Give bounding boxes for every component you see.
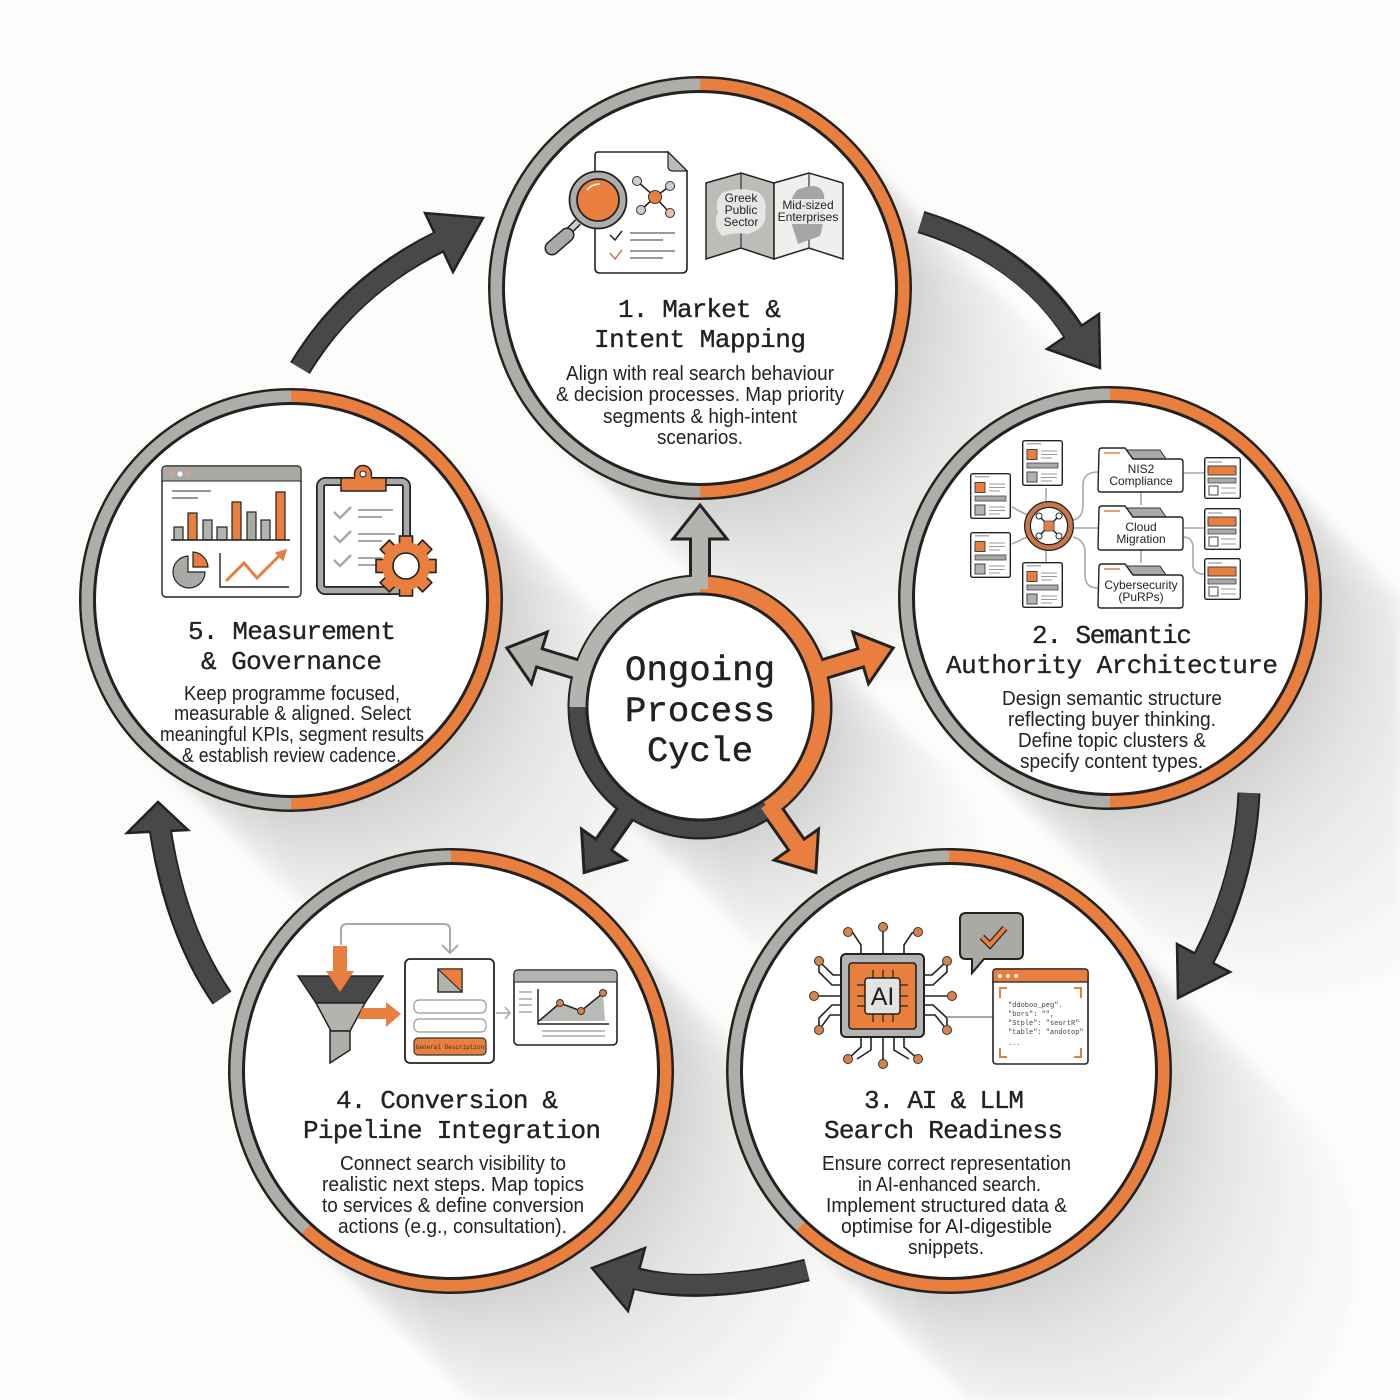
heading: step 4: Pipeline Integration	[303, 1116, 601, 1146]
icon: topic cluster diagram	[971, 441, 1240, 608]
text: step 3 description: snippets.	[908, 1237, 984, 1259]
icon: document with magnifier and network	[552, 152, 687, 273]
text: step 1 description: Align with real search behaviour	[566, 363, 834, 385]
icon: analytics window	[496, 970, 617, 1045]
icon: clipboard with gear	[320, 466, 436, 596]
panel: step 2 semantic authority architecture	[900, 388, 1320, 808]
text: code snippet: "table": "andotop"	[1008, 1029, 1084, 1037]
text: step 2 description: Design semantic structure	[1002, 688, 1222, 710]
panel: step 4 conversion and pipeline integration	[230, 850, 672, 1292]
text: map labels: Enterprises	[778, 210, 838, 224]
text: folder labels: (PuRPs)	[1118, 590, 1164, 604]
text: map labels: Mid-sized	[782, 198, 834, 212]
icon: dashboard	[162, 466, 301, 597]
icon: folded map with segments	[706, 173, 843, 259]
ring: hub band	[566, 569, 834, 838]
panel: central hub	[499, 505, 901, 888]
text: step 5 description: & establish review cadence.	[182, 745, 401, 767]
panel: step 5 measurement and governance	[80, 390, 502, 810]
text: form button: General Description	[416, 1044, 485, 1051]
text: code snippet: "ddoboo_peg".	[1008, 1002, 1063, 1010]
text: folder labels: Cloud	[1125, 520, 1157, 534]
arrow: step 1 to step 2	[921, 222, 1100, 368]
text: folder labels: Compliance	[1109, 474, 1173, 488]
text: step 3 description: optimise for AI-digestible	[841, 1216, 1052, 1238]
text: hub title: Ongoing	[625, 650, 775, 691]
panel: step 3 AI and LLM search readiness	[728, 850, 1170, 1292]
heading: step 4: 4. Conversion &	[336, 1086, 558, 1116]
text: code snippet: ...	[1008, 1040, 1021, 1048]
text: step 3 description: Implement structured data &	[826, 1195, 1068, 1217]
text: step 1 description: scenarios.	[657, 427, 743, 449]
icon: contact form	[405, 959, 494, 1063]
text: step 5 description: Keep programme focused,	[184, 683, 400, 705]
text: step 1 description: & decision processes. Map priority	[556, 384, 844, 406]
text: step 4 description: actions (e.g., consultation).	[338, 1216, 567, 1238]
text: step 2 description: reflecting buyer thinking.	[1008, 709, 1216, 731]
text: step 1 description: segments & high-intent	[603, 406, 797, 428]
ring: step 4	[230, 850, 672, 1292]
ring: step 5	[80, 390, 502, 810]
text: code snippet: "Stple": "seortR"	[1008, 1020, 1079, 1028]
ring: step 2	[900, 388, 1320, 808]
text: folder labels: NIS2	[1128, 462, 1155, 476]
heading: step 3: Search Readiness	[824, 1116, 1063, 1146]
text: map labels: Greek	[725, 191, 758, 205]
text: step 5 description: meaningful KPIs, segment results	[160, 724, 424, 746]
arrows: hub outward arrows	[499, 505, 901, 888]
arrow: step 4 to step 5	[127, 802, 222, 998]
heading: step 3: 3. AI & LLM	[864, 1086, 1024, 1116]
text: map labels: Sector	[724, 215, 758, 229]
text: step 5 description: measurable & aligned. Select	[174, 703, 411, 725]
icon: structured data window	[947, 969, 1088, 1064]
panel: step 1 market and intent mapping	[490, 78, 910, 498]
text: step 4 description: Connect search visibility to	[340, 1153, 566, 1175]
text: AI label: AI	[871, 983, 894, 1011]
heading: step 1: Intent Mapping	[594, 325, 806, 355]
icon: AI chip	[810, 922, 956, 1068]
text: map labels: Public	[725, 203, 757, 217]
text: code snippet: "bors": "",	[1008, 1011, 1054, 1019]
arrow: step 5 to step 1	[300, 213, 483, 368]
text: step 4 description: to services & define conversion	[322, 1195, 584, 1217]
icon: speech bubble with check	[960, 913, 1023, 973]
text: step 3 description: Ensure correct representation	[822, 1153, 1071, 1175]
text: hub title: Cycle	[647, 731, 753, 772]
text: step 4 description: realistic next steps. Map topics	[322, 1174, 584, 1196]
text: folder labels: Migration	[1116, 532, 1166, 546]
arrow: step 3 to step 4	[592, 1248, 807, 1311]
heading: step 1: 1. Market &	[618, 295, 781, 325]
text: step 3 description: in AI-enhanced search.	[858, 1174, 1041, 1196]
heading: step 2: Authority Architecture	[946, 651, 1278, 681]
icon: funnel with arrows	[298, 924, 458, 1063]
ring: step 3	[728, 850, 1170, 1292]
heading: step 5: & Governance	[201, 647, 382, 677]
text: folder labels: Cybersecurity	[1104, 578, 1178, 592]
text: step 2 description: Define topic clusters &	[1018, 730, 1207, 752]
ring: step 1	[490, 78, 910, 498]
heading: step 5: 5. Measurement	[188, 617, 396, 647]
heading: step 2: 2. Semantic	[1032, 621, 1192, 651]
arrow: step 2 to step 3	[1177, 793, 1249, 998]
text: hub title: Process	[625, 691, 775, 732]
text: step 2 description: specify content types.	[1020, 751, 1203, 773]
